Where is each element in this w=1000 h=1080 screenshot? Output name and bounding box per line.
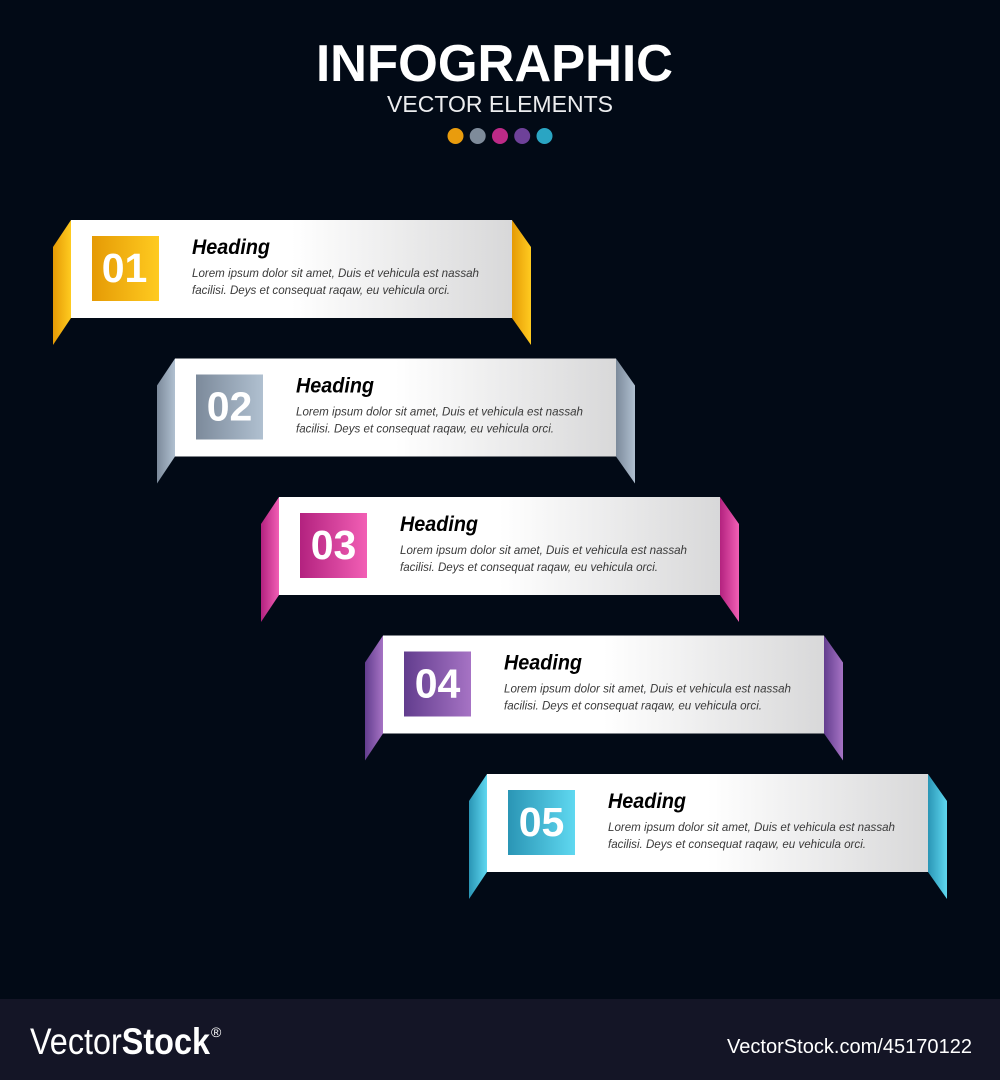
number box: 05 — [519, 799, 564, 845]
right flap — [720, 497, 739, 622]
ribbon body — [487, 774, 928, 872]
body text — [608, 820, 895, 851]
footer logo: VectorStock — [30, 1021, 210, 1062]
footer image id: VectorStock.com/45170122 — [727, 1036, 972, 1058]
body text: facilisi. Deys et consequat raqaw, eu vehicula orci. — [608, 837, 866, 851]
left flap — [53, 220, 71, 345]
right flap — [512, 220, 531, 345]
right flap — [824, 636, 843, 760]
heading: Heading — [296, 374, 374, 398]
subtitle: VECTOR ELEMENTS — [387, 91, 613, 117]
title: INFOGRAPHIC — [316, 35, 673, 93]
right flap — [928, 774, 947, 899]
left flap — [157, 358, 175, 484]
body text — [296, 404, 583, 436]
heading: Heading — [608, 790, 686, 813]
panel: step 02 — [157, 358, 635, 484]
number box — [300, 513, 367, 578]
panel: step 04 — [365, 636, 843, 760]
right flap — [616, 358, 635, 484]
left flap — [261, 497, 279, 622]
ribbon body — [279, 497, 720, 595]
number box — [404, 652, 471, 716]
number box — [92, 236, 159, 301]
body text: Lorem ipsum dolor sit amet, Duis et vehicula est nassah — [400, 543, 687, 557]
ribbon body — [175, 358, 616, 456]
body text: facilisi. Deys et consequat raqaw, eu vehicula orci. — [400, 560, 658, 574]
body text: Lorem ipsum dolor sit amet, Duis et vehicula est nassah — [296, 404, 583, 418]
heading: Heading — [400, 513, 478, 536]
body text: facilisi. Deys et consequat raqaw, eu vehicula orci. — [504, 698, 762, 712]
heading: Heading — [504, 652, 582, 674]
number box — [508, 790, 575, 855]
left flap — [365, 636, 383, 760]
panel: step 05 — [469, 774, 947, 899]
colour dots — [448, 128, 552, 144]
body text: Lorem ipsum dolor sit amet, Duis et vehicula est nassah — [504, 682, 791, 696]
body text: facilisi. Deys et consequat raqaw, eu vehicula orci. — [296, 422, 554, 436]
body text — [504, 682, 791, 712]
number box: 04 — [415, 660, 460, 706]
heading: Heading — [192, 236, 270, 259]
body text: facilisi. Deys et consequat raqaw, eu vehicula orci. — [192, 283, 450, 297]
ribbon body — [71, 220, 512, 318]
number box — [196, 374, 263, 440]
body text — [400, 543, 687, 574]
panel: step 01 — [53, 220, 531, 345]
number box: 02 — [207, 384, 252, 430]
body text: Lorem ipsum dolor sit amet, Duis et vehicula est nassah — [192, 266, 479, 280]
number box: 03 — [311, 522, 356, 568]
panel: step 03 — [261, 497, 739, 622]
body text: Lorem ipsum dolor sit amet, Duis et vehicula est nassah — [608, 820, 895, 834]
ribbon body — [383, 636, 824, 734]
left flap — [469, 774, 487, 899]
footer bar — [0, 999, 1000, 1080]
footer logo: ® — [211, 1024, 222, 1040]
number box: 01 — [102, 245, 147, 291]
body text — [192, 266, 479, 297]
